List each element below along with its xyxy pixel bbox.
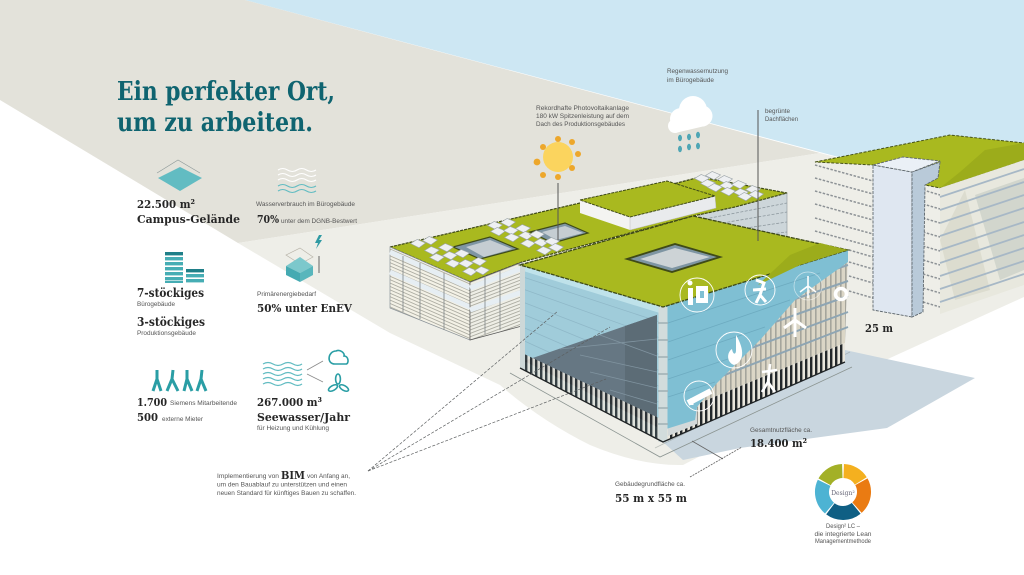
icon: figure <box>745 275 775 305</box>
stat: people: Siemens Mitarbeitende <box>170 400 237 407</box>
donut: Design2 LC: Design² LC – <box>826 523 860 530</box>
label: rainwater: im Bürogebäude <box>667 77 714 84</box>
stat: people <box>137 370 237 424</box>
facade icons <box>680 272 846 411</box>
icon: walker <box>762 364 777 392</box>
title: um zu arbeiten. <box>117 108 313 138</box>
upper roof volume <box>580 200 630 230</box>
background ground <box>238 153 1024 465</box>
stat: floors: Produktionsgebäude <box>137 330 196 337</box>
label: usable area: 18.400 m² <box>750 436 807 450</box>
rear left facade <box>390 247 470 340</box>
icon: info <box>680 278 714 312</box>
icon: lightning <box>315 235 322 249</box>
building shadow <box>663 350 975 460</box>
icon: waves <box>278 168 316 192</box>
icon: camera <box>684 381 714 411</box>
callout: BIM: um den Bauablauf zu unterstützen und einen <box>217 482 347 488</box>
leader line roof <box>757 110 759 241</box>
stat: campus: 22.500 m² <box>137 197 195 211</box>
icon: lake water waves <box>263 362 302 386</box>
stat: people: 1.700 <box>137 395 167 409</box>
leader line solar <box>557 183 559 240</box>
stat: water usage: Wasserverbrauch im Bürogebäude <box>256 201 355 208</box>
icon: campus area <box>157 160 202 191</box>
label: rainwater: Regenwassernutzung <box>667 68 728 75</box>
icon: sun <box>534 136 581 180</box>
main right glass <box>663 250 848 430</box>
label: usable area <box>750 427 812 450</box>
stat: people: 500 <box>137 410 158 424</box>
solar panels left <box>410 236 490 276</box>
callout: BIM: von Anfang an, <box>307 473 350 480</box>
icon: flame <box>716 332 752 368</box>
stat: lake water <box>257 350 351 432</box>
stat: water usage <box>256 168 357 226</box>
main roof <box>520 216 848 307</box>
stat: water usage: 70% <box>257 212 279 226</box>
main right ground floor <box>663 343 845 442</box>
background far plane <box>0 0 820 243</box>
icon: walking people <box>153 370 206 391</box>
main building <box>520 216 848 442</box>
label: usable area: Gesamtnutzfläche ca. <box>750 427 812 434</box>
stat: energy <box>257 235 353 315</box>
main left facade <box>520 263 663 442</box>
label: footprint: 55 m x 55 m <box>615 491 687 505</box>
stat: water usage: unter dem DGNB-Bestwert <box>281 218 357 225</box>
dimension lines on ground <box>510 352 852 457</box>
main right facade <box>663 250 848 418</box>
rear wing facade <box>700 193 787 250</box>
label: green roofs: Dachflächen <box>765 116 798 123</box>
stat: energy: Primärenergiebedarf <box>257 291 316 298</box>
stat: people: externe Mieter <box>162 416 204 423</box>
icon: cloud outline <box>329 350 348 364</box>
stat: energy: 50% unter EnEV <box>257 301 353 315</box>
stat: lake water: für Heizung und Kühlung <box>257 425 329 432</box>
courtyards <box>453 237 518 259</box>
label: green roofs: begrünte <box>765 108 790 115</box>
label: photovoltaics: Rekordhafte Photovoltaikanlage <box>536 105 629 112</box>
background sky <box>245 0 1024 206</box>
donut: Design2 LC: die integrierte Lean <box>814 531 872 538</box>
icon: fan outline <box>327 374 350 393</box>
label: photovoltaics: 180 kW Spitzenleistung auf dem <box>536 113 629 120</box>
label: green roofs <box>765 108 798 123</box>
far right building <box>815 135 1024 317</box>
facade far building right <box>940 160 1024 314</box>
stat: floors: 7-stöckiges <box>137 285 204 300</box>
leader line footprint <box>690 447 742 477</box>
icon: energy cube <box>286 248 319 282</box>
title: Ein perfekter Ort, <box>117 77 335 107</box>
callout: BIM <box>217 468 356 497</box>
donut: Design2 LC: Design² <box>831 490 855 497</box>
main courtyard <box>627 244 720 272</box>
title <box>117 77 335 138</box>
label: photovoltaics: Dach des Produktionsgebäudes <box>536 121 625 128</box>
rear building <box>390 172 787 340</box>
label: footprint: Gebäudegrundfläche ca. <box>615 481 685 488</box>
callout: BIM: BIM <box>281 468 305 482</box>
callout: BIM: Implementierung von <box>217 473 279 480</box>
arrows to cloud and fan <box>307 361 323 382</box>
icon: stacked floors <box>165 252 204 283</box>
stat: lake water: 267.000 m³ <box>257 395 322 409</box>
stat: floors: 3-stöckiges <box>137 314 205 329</box>
solar panels middle <box>488 218 564 255</box>
label: footprint <box>615 481 687 505</box>
rear building roof <box>390 177 787 282</box>
stat: floors <box>137 252 205 337</box>
stat: floors: Bürogebäude <box>137 301 175 308</box>
rear front facade <box>470 262 522 340</box>
tower <box>873 157 940 317</box>
donut: Design2 LC <box>814 471 872 545</box>
label: height: 25 m <box>865 321 893 335</box>
donut: Design2 LC: Managementmethode <box>815 538 871 545</box>
solar panels right <box>694 172 764 201</box>
icon: wind turbine <box>794 272 822 300</box>
label: rainwater <box>667 68 728 84</box>
BIM leader lines <box>368 311 610 471</box>
label: photovoltaics <box>536 105 629 128</box>
stat: lake water: Seewasser/Jahr <box>257 410 351 424</box>
leader line floor area <box>692 441 723 459</box>
icon: cloud with rain <box>668 96 712 152</box>
main left ground floor <box>520 352 663 442</box>
icon: turbine white <box>784 308 806 337</box>
icon: ring <box>836 288 846 300</box>
stat: campus <box>137 160 240 226</box>
callout: BIM: neuen Standard für künftiges Bauen zu schaffen. <box>217 490 356 497</box>
stat: campus: Campus-Gelände <box>137 212 240 226</box>
facade far building left <box>815 165 940 307</box>
roof far building <box>815 135 1024 188</box>
